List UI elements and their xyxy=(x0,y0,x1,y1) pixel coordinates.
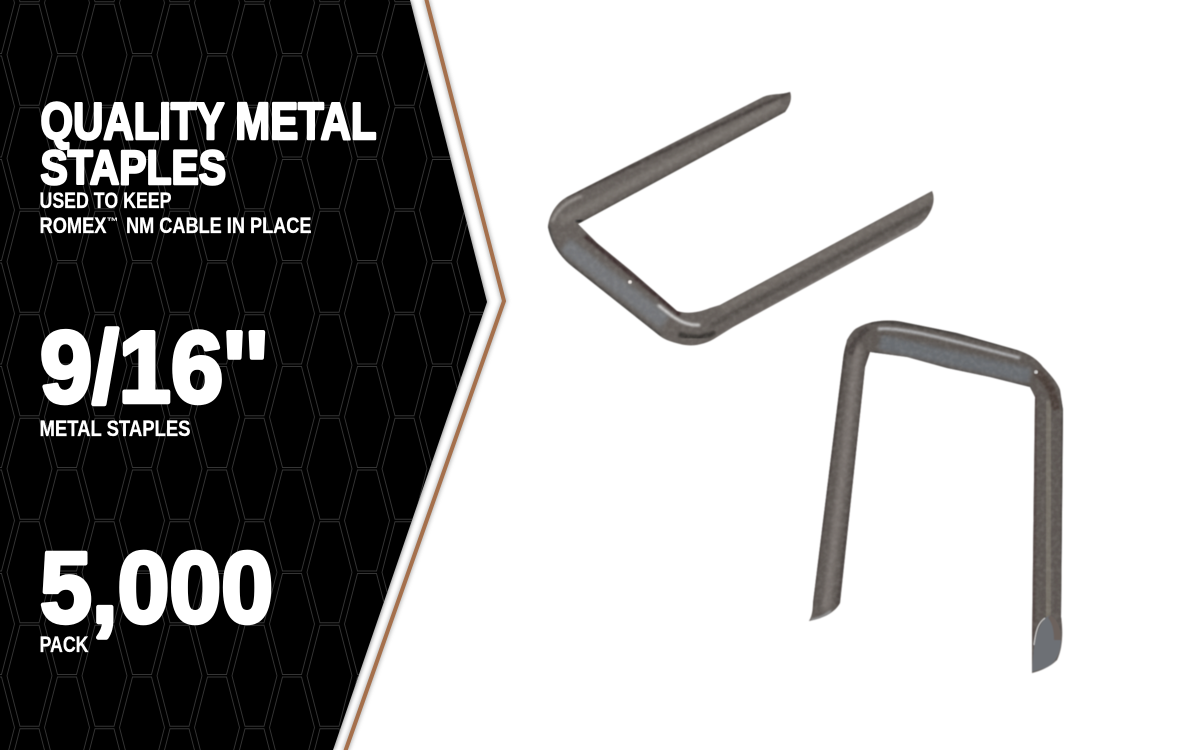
prong shading xyxy=(560,103,780,222)
stat: 5,000: 5,000 xyxy=(40,532,273,644)
panel: black chevron with hexagon pattern xyxy=(0,0,488,750)
crosspiece shading xyxy=(565,245,665,322)
photo: upper metal staple xyxy=(540,85,940,350)
photo: lower metal staple xyxy=(800,315,1070,680)
subheading: used to keep romex cable in place: ™ xyxy=(106,216,118,228)
heading: quality metal staples xyxy=(40,93,376,195)
bend highlights xyxy=(658,305,700,325)
subheading: used to keep romex cable in place: USED TO KEEP xyxy=(40,188,172,213)
heading: quality metal staples: STAPLES xyxy=(40,142,226,195)
cut tip xyxy=(1032,615,1061,672)
crosspiece shading xyxy=(880,342,1030,376)
subheading: used to keep romex cable in place: ROMEX xyxy=(40,213,106,238)
stat: 9/16 inch: 9/16'' xyxy=(40,312,268,424)
prong shading xyxy=(826,345,858,610)
subheading: used to keep romex cable in place xyxy=(40,188,312,238)
heading: quality metal staples: QUALITY METAL xyxy=(40,93,376,151)
label: pack: PACK xyxy=(40,632,89,657)
label: metal staples: METAL STAPLES xyxy=(40,416,190,441)
subheading: used to keep romex cable in place: NM CABLE IN PLACE xyxy=(126,213,312,238)
copper chevron line xyxy=(345,0,504,750)
